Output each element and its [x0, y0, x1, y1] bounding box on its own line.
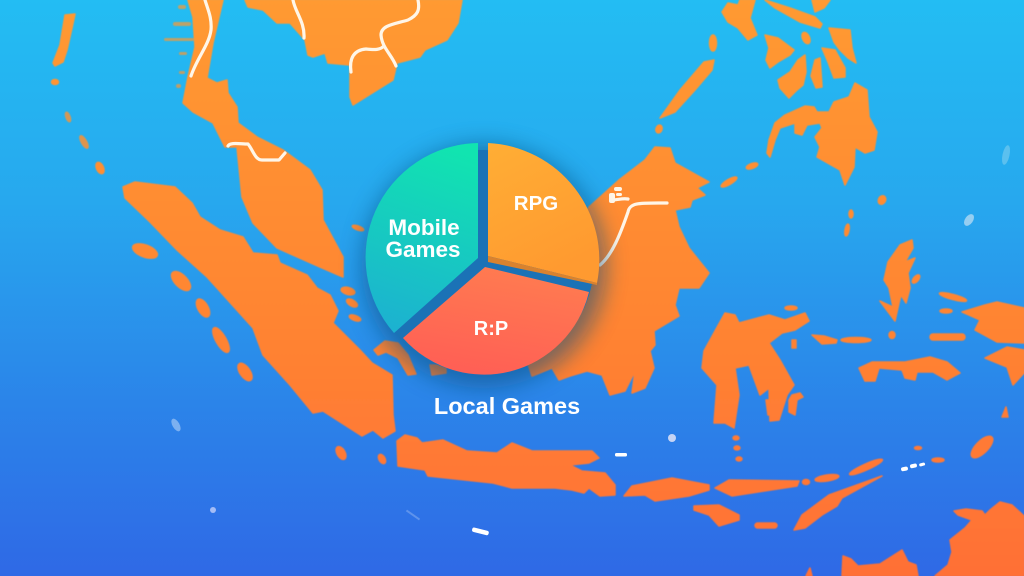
- islands: Lesser Sunda: [624, 407, 1008, 530]
- label: Mobile Games: Mobile: [388, 215, 460, 240]
- landmass: Sulawesi: [702, 313, 809, 428]
- caption: Local Games: Local Games: [434, 393, 580, 419]
- islands: Maluku and Seram: [766, 291, 967, 415]
- islands: west coast chain: [52, 14, 446, 465]
- landmass: Java: [397, 435, 615, 496]
- landmass: Malay Peninsula: [183, 0, 343, 277]
- pie backing: [370, 150, 594, 374]
- landmass: Sumatra: [123, 182, 395, 438]
- slice: R&P: [403, 267, 589, 375]
- island: Mindanao: [767, 83, 877, 185]
- islands: Philippines: [655, 0, 887, 236]
- landmass: Borneo: [520, 147, 709, 395]
- pie chart: [362, 143, 606, 388]
- label: Games: Games: [385, 237, 461, 262]
- islands: New Guinea: [962, 302, 1024, 385]
- landmass: Australia: [806, 502, 1024, 576]
- faint islands and white specks: [169, 144, 1012, 536]
- islands: Halmahera: [880, 240, 921, 321]
- border marker cluster: [609, 187, 622, 203]
- label: R:P: R:P: [474, 318, 508, 340]
- small coastal dots near Malay Peninsula: [164, 5, 194, 88]
- landmass: Indochina: [245, 0, 462, 105]
- slice edge: RPG: [488, 256, 597, 285]
- pie shadow: [362, 144, 606, 388]
- national borders: [191, 0, 667, 265]
- slice: Mobile Games: [366, 143, 478, 333]
- slice: RPG: [488, 143, 599, 283]
- label: RPG: RPG: [514, 192, 558, 215]
